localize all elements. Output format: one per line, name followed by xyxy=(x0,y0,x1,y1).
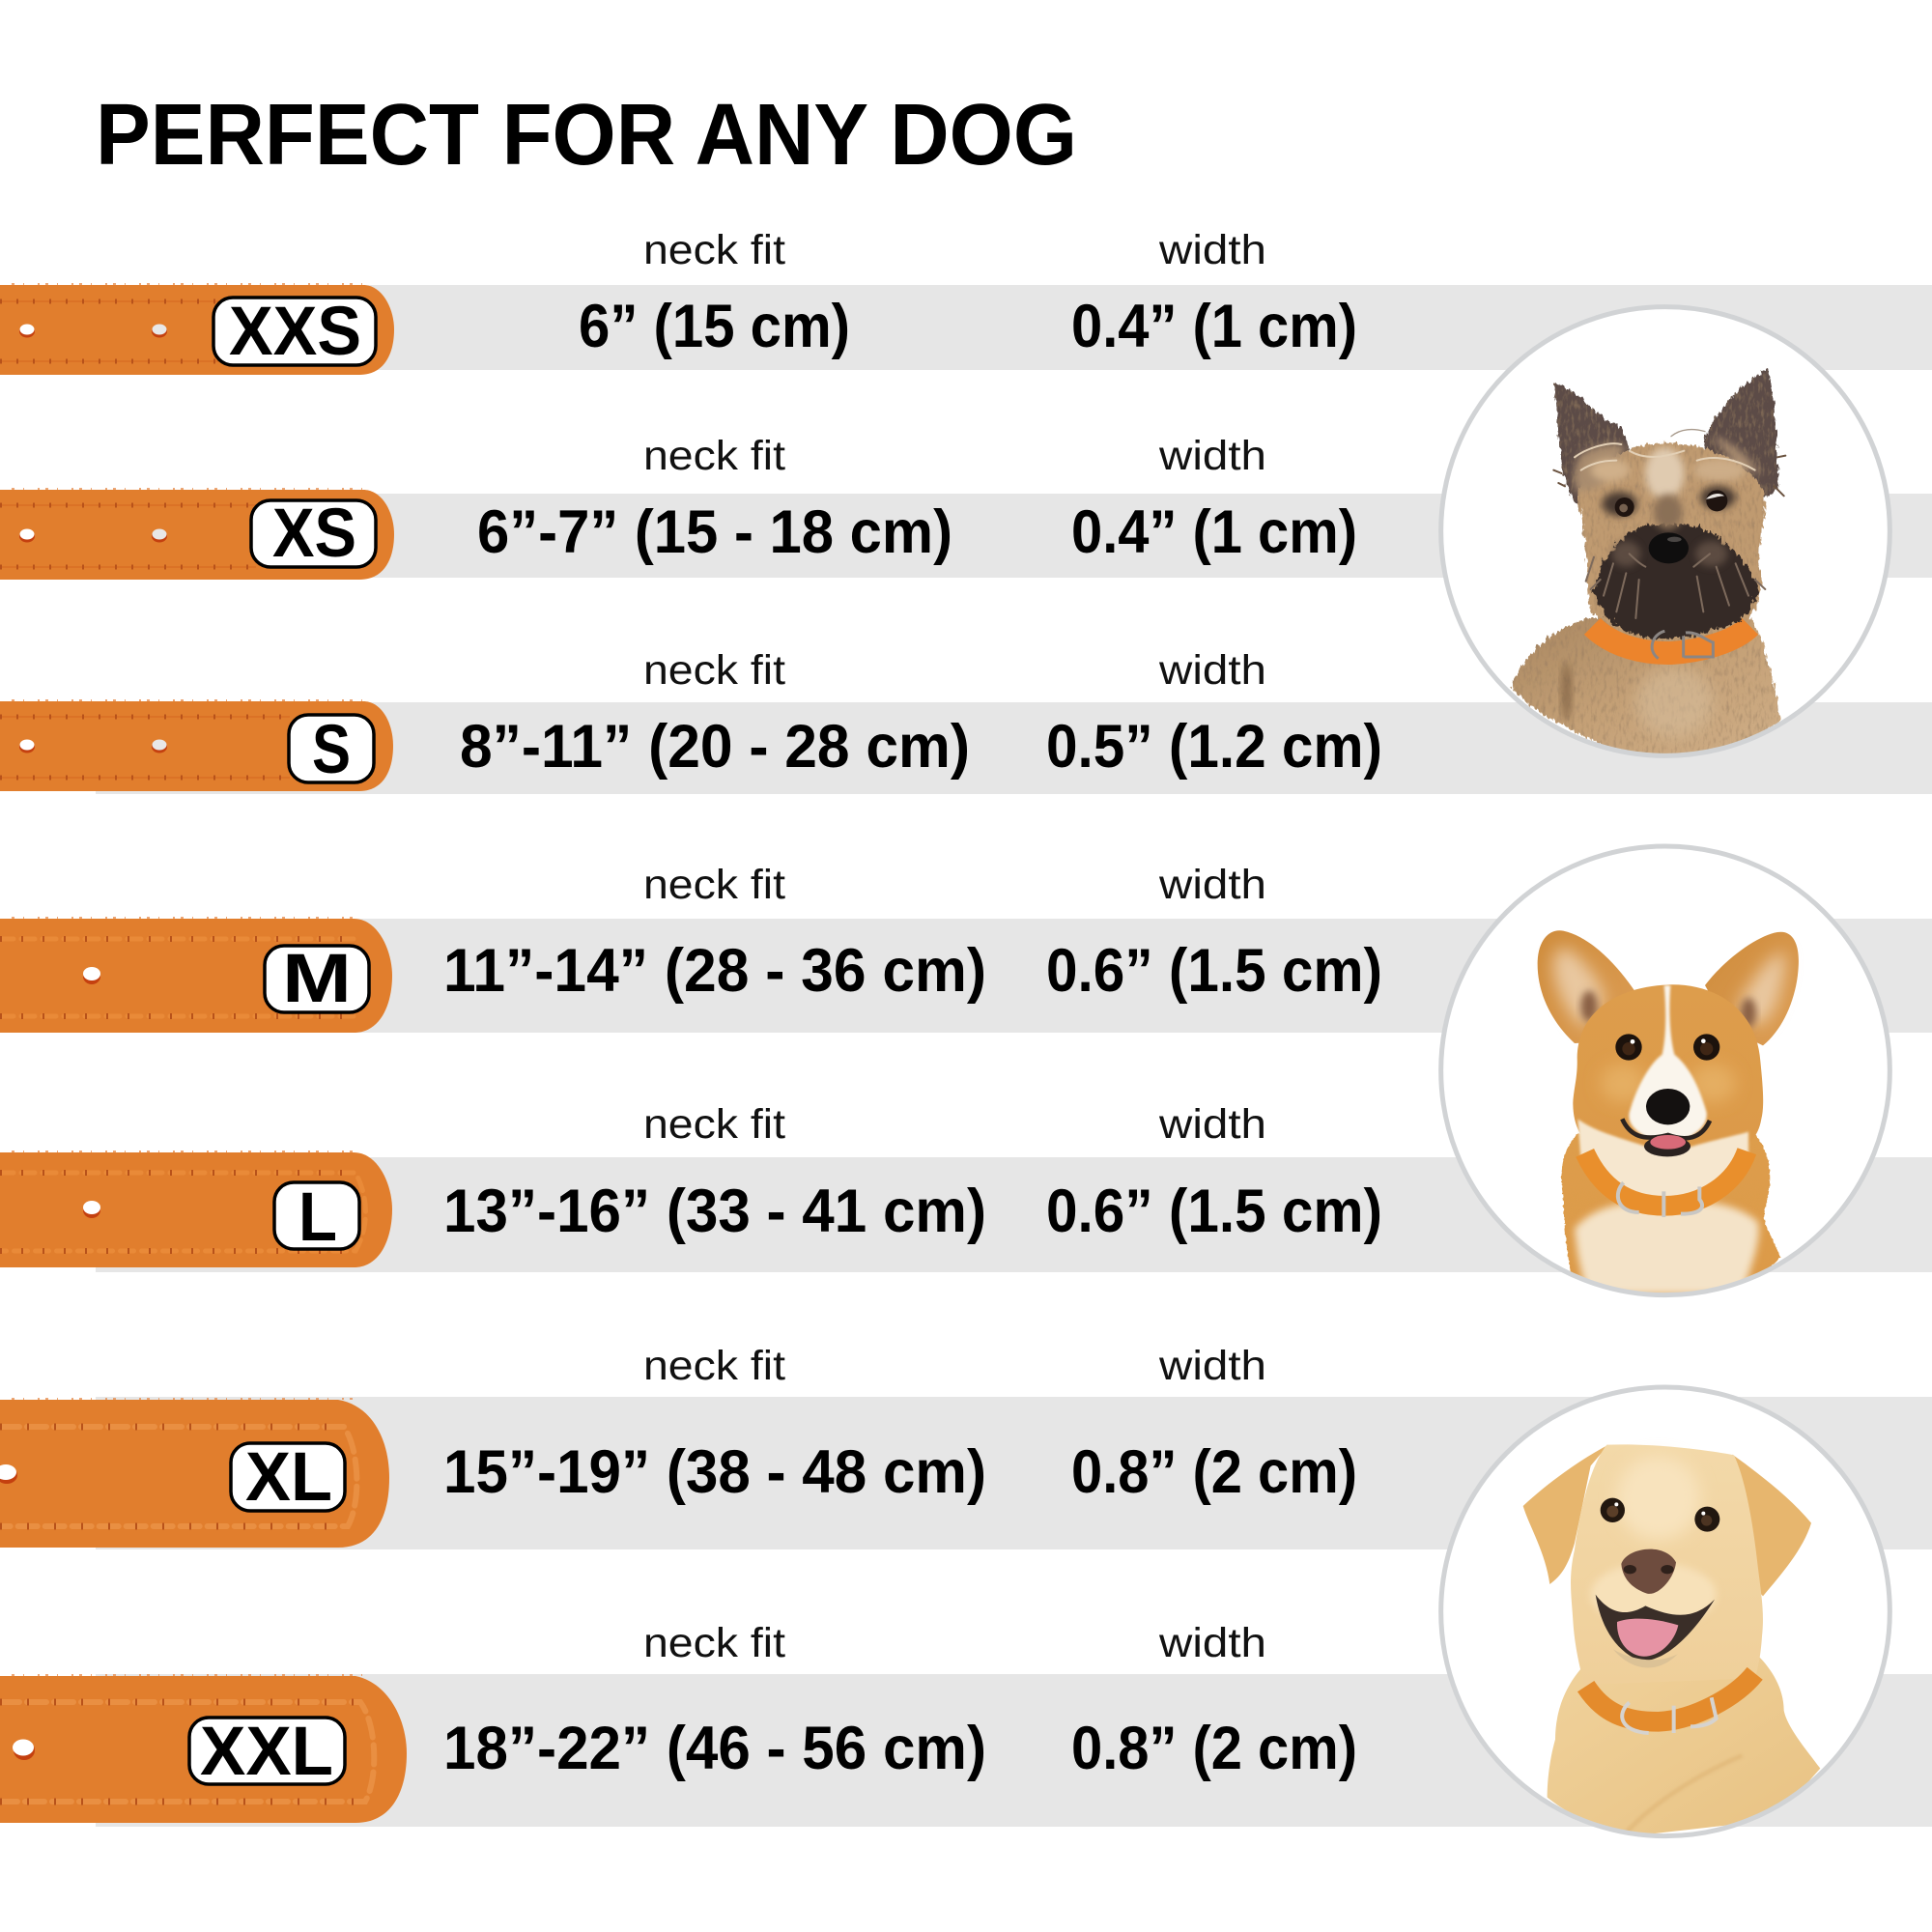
blaze and muzzle xyxy=(1629,985,1707,1147)
collar: XS xyxy=(0,489,394,580)
width value: 0.8” (2 cm) xyxy=(1071,1715,1357,1782)
row: M xyxy=(0,862,1932,1033)
nose xyxy=(1621,1549,1676,1594)
ears xyxy=(1538,930,1634,1043)
collar xyxy=(1586,1673,1755,1721)
neck fit value: 15”-19” (38 - 48 cm) xyxy=(443,1438,986,1506)
width value: 0.4” (1 cm) xyxy=(1071,293,1357,360)
band: XS xyxy=(96,494,1932,578)
width value: 0.4” (1 cm) xyxy=(1071,498,1357,566)
neck fit label: neck fit xyxy=(643,433,785,479)
badge: XXS: XXS xyxy=(229,294,361,370)
mouth xyxy=(1596,1595,1715,1661)
badge: L xyxy=(274,1179,359,1256)
width label: width xyxy=(1158,1101,1266,1148)
width value: 0.6” (1.5 cm) xyxy=(1046,937,1382,1005)
band: XL xyxy=(96,1397,1932,1549)
collar: M xyxy=(0,918,392,1033)
neck fit value: 8”-11” (20 - 28 cm) xyxy=(460,713,970,781)
width value: 0.8” (2 cm) xyxy=(1071,1438,1357,1506)
band: M xyxy=(96,919,1932,1033)
tongue xyxy=(1617,1619,1678,1657)
collar: XXL xyxy=(0,1675,407,1823)
nose xyxy=(1646,1089,1690,1124)
neck fit value: 13”-16” (33 - 41 cm) xyxy=(443,1178,986,1245)
badge: S: S xyxy=(312,712,351,788)
dog portrait: labrador xyxy=(1441,1387,1889,1836)
neck fit label: neck fit xyxy=(643,1101,785,1148)
neck fit label: neck fit xyxy=(643,227,785,273)
width label: width xyxy=(1158,1343,1266,1389)
band: XXL xyxy=(96,1674,1932,1827)
width value: 0.5” (1.2 cm) xyxy=(1046,713,1382,781)
ring xyxy=(1441,1387,1889,1836)
neck fit label: neck fit xyxy=(643,647,785,694)
neck fit label: neck fit xyxy=(643,862,785,908)
band: XXS xyxy=(96,285,1932,370)
body xyxy=(1512,618,1780,756)
neck fit value: 11”-14” (28 - 36 cm) xyxy=(443,937,986,1005)
collar: S xyxy=(0,700,393,791)
beard xyxy=(1596,525,1758,639)
row: XXS xyxy=(0,227,1932,375)
width label: width xyxy=(1158,433,1266,479)
head xyxy=(1573,984,1763,1151)
badge: XL: XL xyxy=(245,1439,332,1516)
fur wisps xyxy=(1553,430,1785,618)
head xyxy=(1577,443,1765,638)
eyes xyxy=(1601,1498,1625,1522)
neck fit label: neck fit xyxy=(643,1620,785,1666)
width label: width xyxy=(1158,862,1266,908)
badge: XXL: XXL xyxy=(200,1714,333,1790)
collar: XXS xyxy=(0,284,394,375)
neck fit value: 18”-22” (46 - 56 cm) xyxy=(443,1715,986,1782)
neck fit value: 6” (15 cm) xyxy=(579,293,850,360)
title: PERFECT FOR ANY DOG xyxy=(96,87,1077,184)
buckle xyxy=(1652,631,1713,659)
width label: width xyxy=(1158,647,1266,694)
ears xyxy=(1554,384,1633,515)
band: L xyxy=(96,1157,1932,1272)
width label: width xyxy=(1158,1620,1266,1666)
ring xyxy=(1441,846,1889,1295)
badge: L: L xyxy=(298,1179,337,1256)
width value: 0.6” (1.5 cm) xyxy=(1046,1178,1382,1245)
collar xyxy=(1592,626,1750,653)
row: XXL xyxy=(0,1620,1932,1827)
mouth xyxy=(1644,1140,1690,1157)
badge: M xyxy=(265,941,369,1017)
dog portrait: corgi xyxy=(1441,846,1889,1295)
neck fit value: 6”-7” (15 - 18 cm) xyxy=(477,498,952,566)
badge: XS: XS xyxy=(272,496,356,572)
ears xyxy=(1523,1445,1608,1584)
collar: L xyxy=(0,1151,392,1267)
collar: XL xyxy=(0,1399,389,1548)
row: S xyxy=(0,647,1932,794)
eyes xyxy=(1615,497,1634,517)
head xyxy=(1571,1444,1763,1685)
badge: M: M xyxy=(282,941,352,1017)
row: XS xyxy=(0,433,1932,580)
eyes xyxy=(1615,1034,1642,1061)
ring xyxy=(1441,307,1889,755)
collar xyxy=(1585,1151,1747,1206)
body xyxy=(1561,1133,1780,1294)
dog portrait: terrier xyxy=(1441,307,1889,756)
row: XL xyxy=(0,1343,1932,1549)
badge: S xyxy=(289,712,374,788)
nose xyxy=(1649,532,1689,563)
neck fit label: neck fit xyxy=(643,1343,785,1389)
width label: width xyxy=(1158,227,1266,273)
body xyxy=(1548,1656,1820,1836)
band: S xyxy=(96,702,1932,794)
row: L xyxy=(0,1101,1932,1272)
white neck xyxy=(1577,1119,1750,1196)
